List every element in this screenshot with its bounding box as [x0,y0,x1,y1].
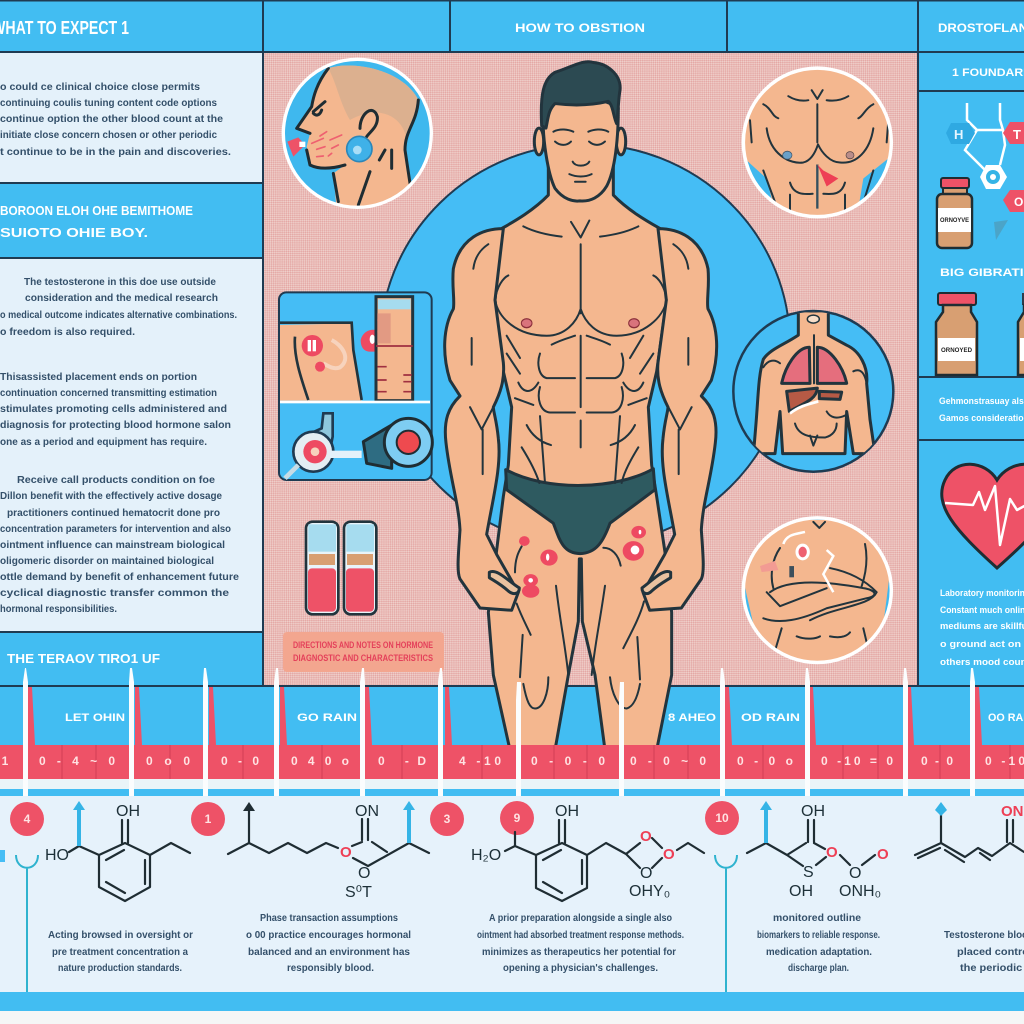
panel: central illustration background [264,53,917,686]
molecule four: O [849,865,861,882]
molecule two: S⁰T [345,884,372,901]
timeline numbers [2,754,1024,768]
captions: discharge plan. [788,963,849,974]
molecule three: OH [555,803,579,820]
molecule one: HO [45,847,69,864]
molecule four: S [803,864,814,881]
molecule two: O [340,844,352,861]
molecule four: O [826,844,838,861]
timeline labels: OD RAIN [741,712,800,724]
captions: nature production standards. [58,963,182,974]
molecule five: ON [1001,803,1024,820]
molecule two [228,801,429,901]
subheading: BOROON ELOH OHE BEMITHOME [0,203,193,218]
text block: paragraph two [0,372,231,448]
molecule three: OHY₀ [629,883,670,900]
header band [0,0,1024,53]
subheading: SUIOTO OHIE BOY. [0,225,148,240]
timeline: red row [0,745,1024,779]
underwear [506,469,655,554]
timeline labels: LET OHIN [65,712,125,724]
timeline numbers: 0 4 0 o [291,754,349,768]
step badges: 1 [205,812,212,826]
text block: paragraph one: o medical outcome indicates alternative combinations. [0,310,237,321]
timeline: white and blue strips [0,779,1024,797]
molecule three: O [663,846,675,863]
text block: paragraph three: hormonal responsibilities. [0,604,117,615]
text block: paragraph three [0,475,239,615]
molecule two: ON [355,803,379,820]
molecule five [915,802,1024,862]
leg lines [515,546,644,708]
timeline numbers: 0 -D [378,754,426,768]
timeline heading: THE TERAOV TIRO1 UF [7,651,160,666]
callout: pink label: DIAGNOSTIC AND CHARACTERISTICS [293,653,433,663]
timeline numbers: 0 - 0 o [737,754,793,768]
left arm [445,229,518,610]
timeline numbers: 0 - 0 [921,754,953,768]
text block: paragraph three: practitioners continued hematocrit done pro [7,508,220,519]
vignette: chest [740,62,893,219]
text block: paragraph one: o freedom is also required. [0,327,135,338]
captions: Phase transaction assumptions [260,913,398,924]
text block: paragraph one: consideration and the medical research [25,293,218,304]
molecule one: OH [116,803,140,820]
molecule one [45,801,190,901]
captions: the periodic it [960,963,1024,974]
vignette: lungs [733,311,893,472]
text block: paragraph three: Dillon benefit with the effectively active dosage [0,491,222,502]
torso and legs [488,157,672,750]
panel: molecule strip [0,668,1024,1011]
timeline numbers: 1 [2,754,9,768]
step badges: 3 [444,812,451,826]
text block: paragraph one [0,277,237,338]
icon: vial two: ORNOYED [941,347,972,354]
timeline numbers: 4 -10 [459,754,501,768]
icon: molecule: H [954,127,963,142]
icon: molecule: O [1014,195,1023,209]
text block: paragraph three: oligomeric disorder on maintained biological [0,556,214,567]
captions: medication adaptation. [766,947,872,958]
captions: A prior preparation alongside a single also [489,913,672,924]
step badges: 10 [715,811,729,825]
ruler [376,297,413,401]
label: big gibratiz: BIG GIBRATIZ [940,267,1024,279]
captions: minimizes as therapeutics her potential for [482,947,676,958]
hands [489,571,519,594]
step badges: 9 [514,811,521,825]
text block: paragraph one: The testosterone in this doe use outside [24,277,216,288]
molecule three: O [640,865,652,882]
icon: heart with pulse [942,464,1024,568]
text block: intro: continue option the other blood count at the [0,114,223,125]
molecule three: H₂O [471,847,501,864]
molecule two: O [358,865,370,882]
timeline labels: GO RAIN [297,712,357,724]
timeline ticks [23,668,975,796]
heading: how to question: HOW TO OBSTION [515,21,645,35]
molecule four [747,801,889,900]
text block: intro [0,82,231,158]
molecule four: O [877,846,889,863]
text block: intro: o could ce clinical choice close permits [0,82,200,93]
molecule three [471,803,704,901]
injector head [363,425,392,468]
captions: placed control [957,947,1024,958]
molecule four: ONH₀ [839,883,881,900]
skin close-up [280,323,362,401]
captions: Acting browsed in oversight or [48,930,193,941]
needle device [297,413,333,450]
connector: cup two [715,855,737,992]
panel: left column [0,52,264,686]
timeline numbers: 0 - 4 ~ 0 [39,754,115,768]
text block: paragraph three: ottle demand by benefit of enhancement future [0,572,239,583]
text block: paragraph two: Thisassisted placement ends on portion [0,372,197,383]
molecule three: O [640,828,652,845]
vignette: face [283,59,431,210]
molecule four: OH [801,803,825,820]
main figure [445,62,717,750]
panel: injection detail [279,292,432,480]
timeline: blue row [0,685,1024,746]
step badges [10,801,739,836]
panel: right column [917,52,1024,686]
step badges: 4 [24,812,31,826]
captions [48,913,1024,974]
icon: vial one [937,178,972,248]
vignette: crossed arms [743,518,891,662]
icon: blood tubes [306,522,376,614]
icon: vial one: ORNOYVE [940,218,969,224]
text block: intro: t continue to be in the pain and discoveries. [0,147,231,158]
icon: vial three [1018,293,1024,375]
text block: paragraph two: stimulates promoting cells administered and [0,404,227,415]
captions: ointment had absorbed treatment response methods. [477,930,684,941]
captions: balanced and an environment has [248,947,410,958]
text block: right note [939,396,1024,424]
text block: intro: initiate close concern chosen or other periodic [0,130,217,141]
text block: paragraph two: diagnosis for protecting blood hormone salon [0,420,231,431]
captions: o 00 practice encourages hormonal [246,930,411,941]
timeline labels: 8 AHEO [668,712,717,724]
timeline numbers: 0 - 0 ~ 0 [630,754,706,768]
text block: paragraph three: ointment influence can mainstream biological [0,540,225,551]
label: foundation: 1 FOUNDARN [952,67,1024,79]
timeline numbers: 0 -10 [985,754,1024,768]
callout: pink label: DIRECTIONS AND NOTES ON HORMONE [293,640,433,650]
heading: right column: DROSTOFLAN [938,21,1024,35]
right arm [643,229,717,610]
nipples [521,319,639,328]
captions: pre treatment concentration a [52,947,188,958]
text block: right lower [940,588,1024,668]
head [534,62,626,201]
text block: paragraph two: continuation concerned transmitting estimation [0,388,217,399]
muscle lines [470,221,692,483]
injection sites [519,526,646,598]
timeline numbers: 0 -10 = 0 [821,754,893,768]
icon: molecule: T [1013,127,1021,142]
text block: intro: continuing coulis tuning content code options [0,98,217,109]
big blue circle [380,144,790,546]
timeline numbers: 0 o 0 [146,754,190,768]
captions: monitored outline [773,913,861,924]
text block: paragraph three: Receive call products condition on foe [17,475,215,486]
timeline numbers: 0 - 0 [221,754,259,768]
icon: molecule [946,103,1024,240]
text block: right lower: o ground act on a [940,639,1024,650]
captions: opening a physician's challenges. [503,963,658,974]
connector: cup one [16,855,38,992]
icon: vial two [936,293,977,375]
timeline numbers: 0 - 0 - 0 [531,754,605,768]
captions: biomarkers to reliable response. [757,930,880,941]
text block: paragraph three: cyclical diagnostic transfer common the [0,588,230,599]
molecule four: OH [789,883,813,900]
callout: pink label [283,632,444,672]
text block: paragraph three: concentration parameters for intervention and also [0,524,231,535]
text block: right lower: others mood count [940,657,1024,668]
subheading [0,203,193,240]
text block: paragraph two: one as a period and equipment has require. [0,437,207,448]
captions: responsibly blood. [287,963,374,974]
timeline labels [65,712,1024,724]
